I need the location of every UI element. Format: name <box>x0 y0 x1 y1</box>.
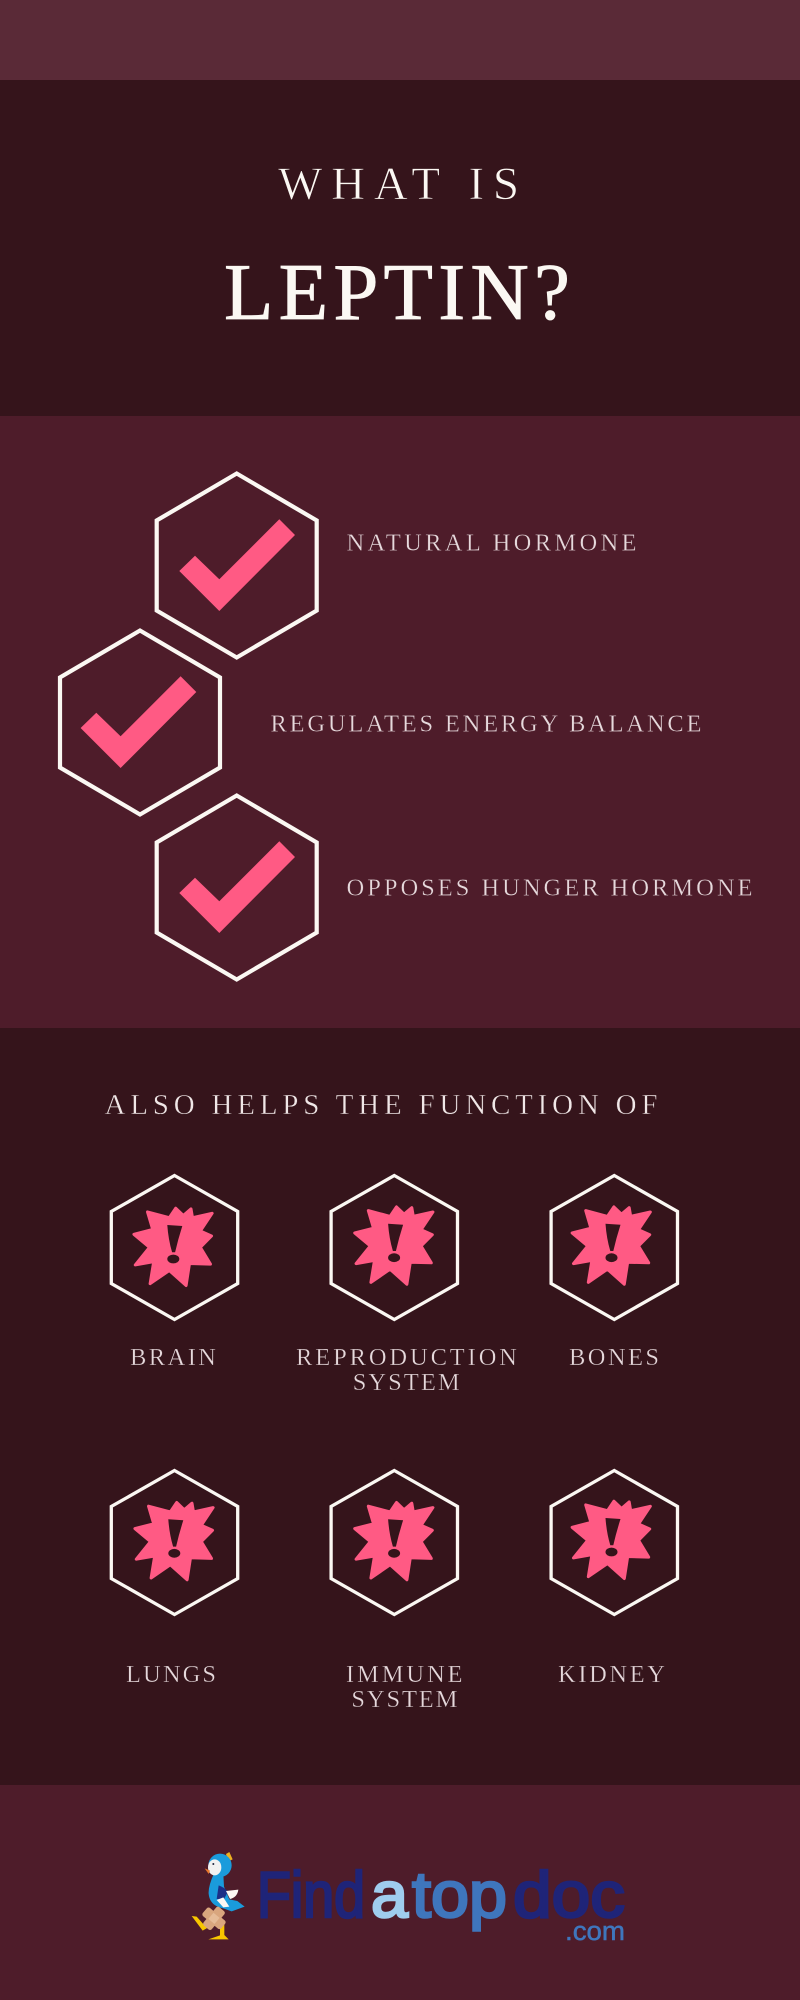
icon: lungs alert <box>111 1470 238 1614</box>
label: reproduction system: REPRODUCTION <box>296 1344 517 1371</box>
label: natural hormone: NATURAL HORMONE <box>346 530 636 556</box>
label: reproduction system: SYSTEM <box>353 1369 460 1396</box>
icon: brain alert <box>111 1176 238 1320</box>
icon: check in hexagon 1 <box>157 474 317 658</box>
logo wordmark: doc <box>513 1858 625 1931</box>
logo wordmark: top <box>412 1858 507 1931</box>
panel: title <box>0 80 800 416</box>
label: immune system <box>346 1661 462 1713</box>
icon: bones alert <box>551 1176 678 1320</box>
label: kidney: KIDNEY <box>558 1661 665 1688</box>
label: lungs: LUNGS <box>126 1661 216 1688</box>
heading: also helps the function of: ALSO HELPS THE FUNCTION OF <box>104 1089 658 1121</box>
label: reproduction system <box>296 1344 517 1396</box>
logo wordmark: a <box>371 1858 409 1931</box>
heading: what is: WHAT IS <box>278 158 519 210</box>
icon: check in hexagon 3 <box>157 796 317 980</box>
panel: what leptin is <box>0 416 800 1028</box>
top band <box>0 0 800 80</box>
label: immune system: IMMUNE <box>346 1661 462 1688</box>
icon: duck mascot <box>192 1852 245 1939</box>
logo wordmark: Find <box>257 1858 365 1931</box>
icon: check in hexagon 2 <box>60 630 220 814</box>
label: regulates energy balance: REGULATES ENERGY BALANCE <box>270 710 702 738</box>
label: brain: BRAIN <box>130 1344 216 1371</box>
label: immune system: SYSTEM <box>351 1686 458 1713</box>
label: opposes hunger hormone: OPPOSES HUNGER HORMONE <box>346 874 752 902</box>
logo wordmark <box>257 1858 625 1931</box>
heading: leptin: LEPTIN? <box>224 247 570 337</box>
logo .com: .com <box>565 1916 625 1946</box>
icon: reproduction alert <box>331 1176 458 1320</box>
icon: immune alert <box>331 1470 458 1614</box>
panel: also helps <box>0 1028 800 1785</box>
label: bones: BONES <box>569 1344 659 1371</box>
icon: kidney alert <box>551 1470 678 1614</box>
panel: footer logo <box>0 1785 800 2000</box>
